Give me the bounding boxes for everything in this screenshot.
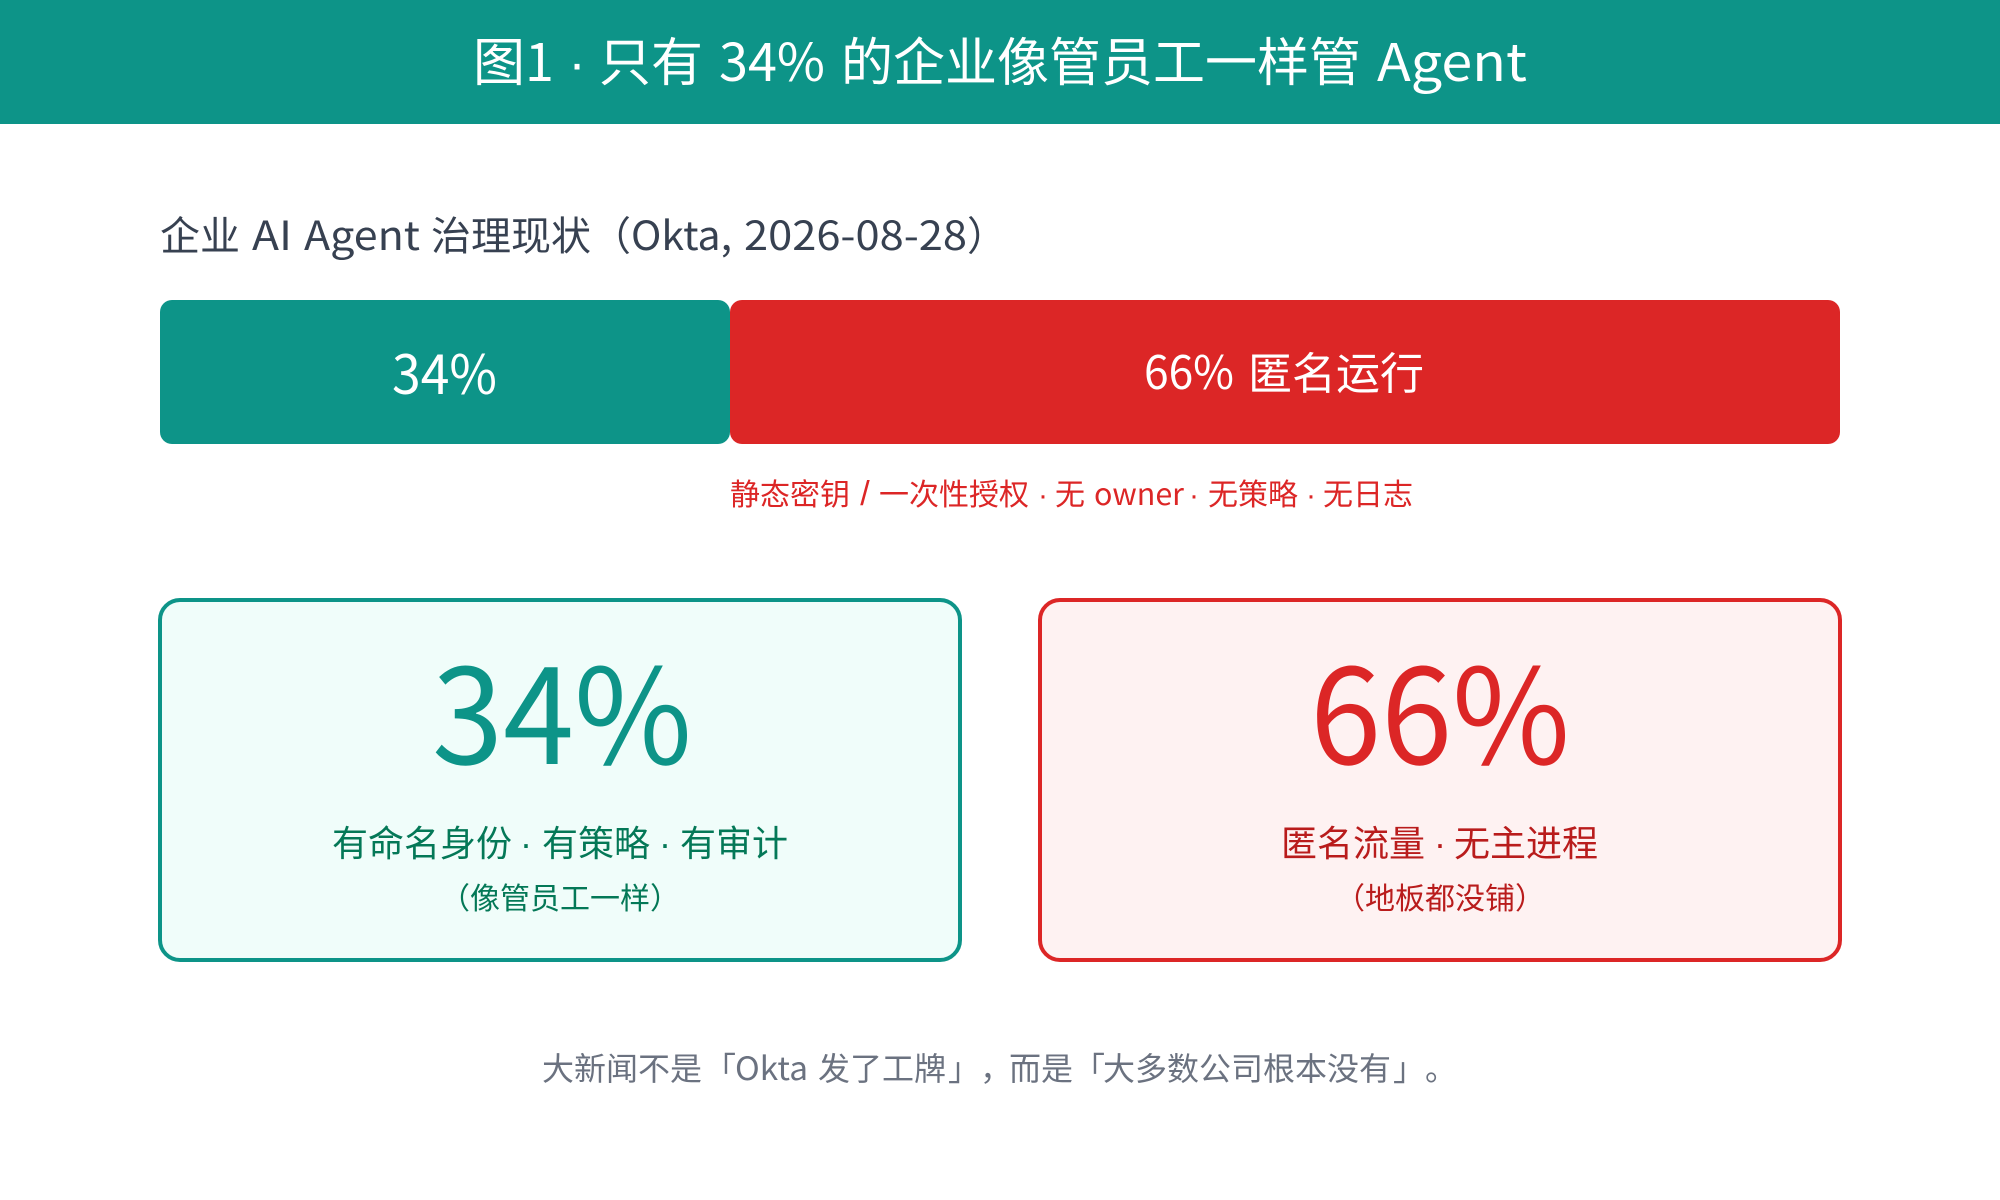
- bar segment: 34%: 34%: [392, 331, 497, 410]
- label: [1281, 815, 1598, 867]
- footer takeaway: [542, 1044, 1457, 1090]
- footer takeaway: 」: [1393, 1044, 1425, 1090]
- footer takeaway: 大多数公司根本没有: [1103, 1044, 1391, 1090]
- red annotation under bar: /: [860, 475, 870, 513]
- note: （地板都没铺）: [1335, 874, 1545, 918]
- stacked bar chart: [160, 300, 1840, 444]
- label: 有命名身份: [332, 815, 512, 867]
- footer takeaway: 大新闻不是: [542, 1044, 702, 1090]
- red annotation under bar: ·: [1038, 479, 1048, 512]
- big number 34%: 34%: [432, 612, 692, 803]
- big number 66%: 66%: [1310, 612, 1570, 803]
- label: 有策略: [542, 815, 650, 867]
- footer takeaway: Okta: [735, 1044, 808, 1090]
- subtitle heading: ）: [967, 204, 1007, 262]
- label: ·: [659, 823, 671, 864]
- subtitle heading: [160, 204, 1007, 262]
- title banner: ·: [568, 35, 586, 93]
- bar segment: 66% anonymous: 匿名运行: [1248, 338, 1424, 402]
- footer takeaway: 而是: [1009, 1044, 1073, 1090]
- title banner: 图1: [473, 21, 554, 96]
- red annotation under bar: [730, 470, 1413, 514]
- red annotation under bar: 静态密钥: [730, 470, 850, 514]
- subtitle heading: Okta,: [631, 204, 732, 262]
- label: 匿名流量: [1281, 815, 1425, 867]
- footer takeaway: 发了工牌: [818, 1044, 946, 1090]
- label: [332, 815, 788, 867]
- title banner: 只有: [599, 21, 703, 96]
- red annotation under bar: ·: [1189, 479, 1199, 512]
- footer takeaway: 「: [704, 1044, 736, 1090]
- panel: 34% governed: [160, 600, 960, 960]
- title banner: [0, 0, 2000, 124]
- label: 无主进程: [1454, 815, 1598, 867]
- bar segment: 34%: [160, 300, 730, 444]
- red annotation under bar: owner: [1094, 470, 1184, 514]
- footer takeaway: 」: [948, 1044, 980, 1090]
- red annotation under bar: 一次性授权: [879, 470, 1029, 514]
- footer takeaway: ，: [980, 1044, 1012, 1090]
- red annotation under bar: 无: [1055, 470, 1085, 514]
- title banner: 的企业像管员工一样管: [841, 21, 1361, 96]
- red annotation under bar: ·: [1306, 479, 1316, 512]
- note: （像管员工一样）: [440, 874, 680, 918]
- label: ·: [520, 823, 532, 864]
- bar segment: 66% anonymous: 66%: [1144, 337, 1234, 403]
- title banner: 34%: [719, 21, 825, 96]
- label: 有审计: [680, 815, 788, 867]
- label: ·: [1434, 823, 1446, 864]
- red annotation under bar: 无策略: [1208, 470, 1298, 514]
- subtitle heading: AI: [252, 204, 292, 262]
- footer takeaway: 「: [1073, 1044, 1105, 1090]
- subtitle heading: 企业: [160, 204, 240, 262]
- title banner: Agent: [1377, 21, 1527, 96]
- red annotation under bar: 无日志: [1323, 470, 1413, 514]
- subtitle heading: 治理现状: [431, 204, 591, 262]
- subtitle heading: 2026-08-28: [744, 204, 967, 262]
- panel: 66% anonymous: [1040, 600, 1840, 960]
- footer takeaway: 。: [1425, 1044, 1457, 1090]
- bar segment: 66% anonymous: [730, 300, 1840, 444]
- subtitle heading: （: [591, 204, 631, 262]
- subtitle heading: Agent: [304, 204, 420, 262]
